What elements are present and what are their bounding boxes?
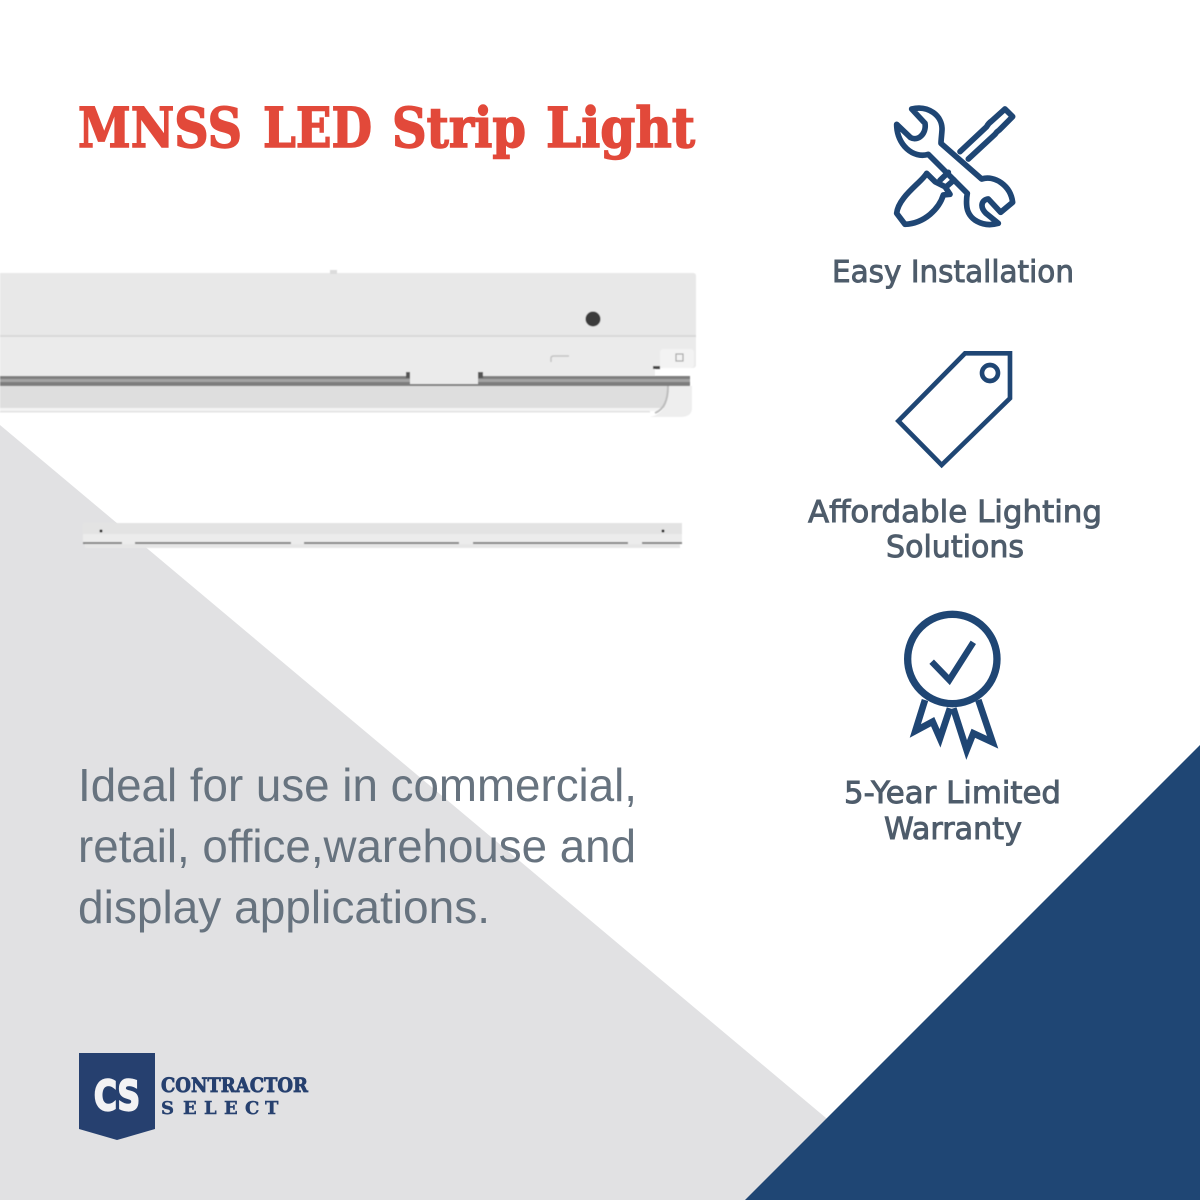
navy corner triangle bbox=[745, 745, 1200, 1200]
icon: award ribbon with check bbox=[908, 614, 997, 750]
grey background triangle bbox=[0, 425, 832, 1200]
label: 5-year limited warranty bbox=[844, 776, 1061, 847]
label: 5-year limited warranty: Warranty bbox=[884, 812, 1022, 847]
small product photo: full-length strip light bbox=[83, 523, 682, 548]
label: easy installation: Easy Installation bbox=[832, 255, 1074, 290]
title: Light bbox=[546, 95, 696, 160]
icon: price tag bbox=[898, 353, 1010, 465]
logo wordmark: CONTRACTOR bbox=[161, 1073, 308, 1097]
description text: display applications. bbox=[78, 881, 490, 933]
title bbox=[78, 95, 696, 160]
description text: retail, office,warehouse and bbox=[78, 820, 636, 872]
title: MNSS bbox=[78, 95, 242, 160]
description text: Ideal for use in commercial, bbox=[78, 759, 637, 811]
logo: contractor select bbox=[79, 1053, 308, 1140]
label: affordable lighting solutions bbox=[808, 495, 1102, 565]
large product photo: LED strip light close-up bbox=[0, 270, 696, 417]
label: 5-year limited warranty: 5-Year Limited bbox=[844, 776, 1061, 811]
logo shield bbox=[79, 1053, 155, 1140]
label: affordable lighting solutions: Solutions bbox=[886, 530, 1024, 565]
title: Strip bbox=[392, 95, 526, 160]
icon: wrench and screwdriver bbox=[897, 108, 1013, 225]
title: LED bbox=[263, 95, 372, 160]
logo monogram: CS bbox=[94, 1072, 140, 1120]
label: affordable lighting solutions: Affordable Lighting bbox=[808, 495, 1102, 530]
logo sub wordmark: SELECT bbox=[161, 1098, 279, 1119]
description text bbox=[78, 759, 637, 933]
